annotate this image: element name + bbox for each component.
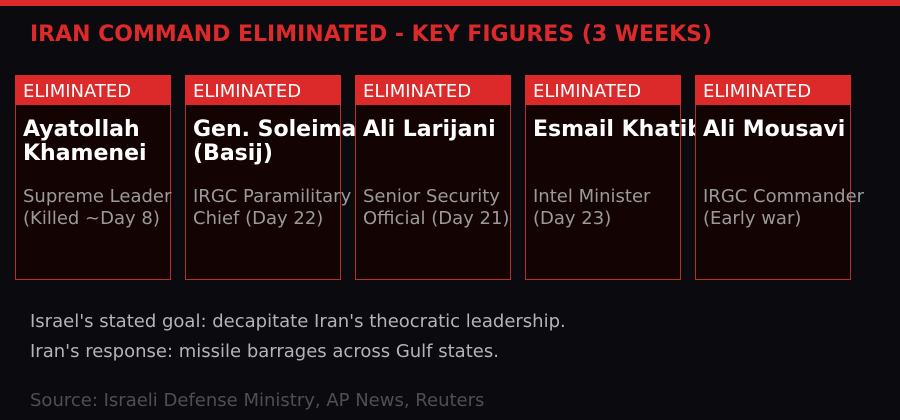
card: Ali Mousavi: ELIMINATED — [703, 81, 811, 102]
card: Esmail Khatib: Intel Minister — [533, 186, 651, 207]
card: Esmail Khatib: Esmail Khatib — [533, 117, 703, 142]
card: Gen. Soleimani — [185, 75, 380, 280]
top accent bar — [0, 0, 900, 6]
card: Gen. Soleimani: ELIMINATED — [193, 81, 301, 102]
card: Ayatollah Khamenei: Khamenei — [23, 141, 147, 166]
summary text: Iran's response: missile barrages across Gulf states. — [30, 341, 499, 362]
source: Source: Israeli Defense Ministry, AP News, Reuters — [30, 390, 484, 411]
card: Gen. Soleimani: Chief (Day 22) — [193, 208, 323, 229]
card: Ayatollah Khamenei: Ayatollah — [23, 117, 140, 142]
card: Gen. Soleimani: IRGC Paramilitary — [193, 186, 352, 207]
card: Ali Mousavi: IRGC Commander — [703, 186, 865, 207]
card: Ali Larijani: Ali Larijani — [363, 117, 496, 142]
summary text: Israel's stated goal: decapitate Iran's theocratic leadership. — [30, 311, 566, 332]
card: Ali Larijani: ELIMINATED — [363, 81, 471, 102]
card: Ali Larijani: Senior Security — [363, 186, 500, 207]
title: IRAN COMMAND ELIMINATED - KEY FIGURES (3 WEEKS) — [30, 22, 712, 47]
card: Ali Larijani: Official (Day 21) — [363, 208, 509, 229]
card: Ali Mousavi — [695, 75, 865, 280]
card: Esmail Khatib: (Day 23) — [533, 208, 611, 229]
card: Ayatollah Khamenei: (Killed ~Day 8) — [23, 208, 160, 229]
card: Esmail Khatib — [525, 75, 703, 280]
card: Ali Mousavi: Ali Mousavi — [703, 117, 845, 142]
card: Ali Mousavi: (Early war) — [703, 208, 801, 229]
card: Ali Larijani — [355, 75, 511, 280]
card: Gen. Soleimani: Gen. Soleimani — [193, 117, 380, 142]
card: Ayatollah Khamenei — [15, 75, 172, 280]
card: Ayatollah Khamenei: ELIMINATED — [23, 81, 131, 102]
summary text — [30, 311, 566, 362]
card: Esmail Khatib: ELIMINATED — [533, 81, 641, 102]
card: Ayatollah Khamenei: Supreme Leader — [23, 186, 172, 207]
card: Gen. Soleimani: (Basij) — [193, 141, 273, 166]
